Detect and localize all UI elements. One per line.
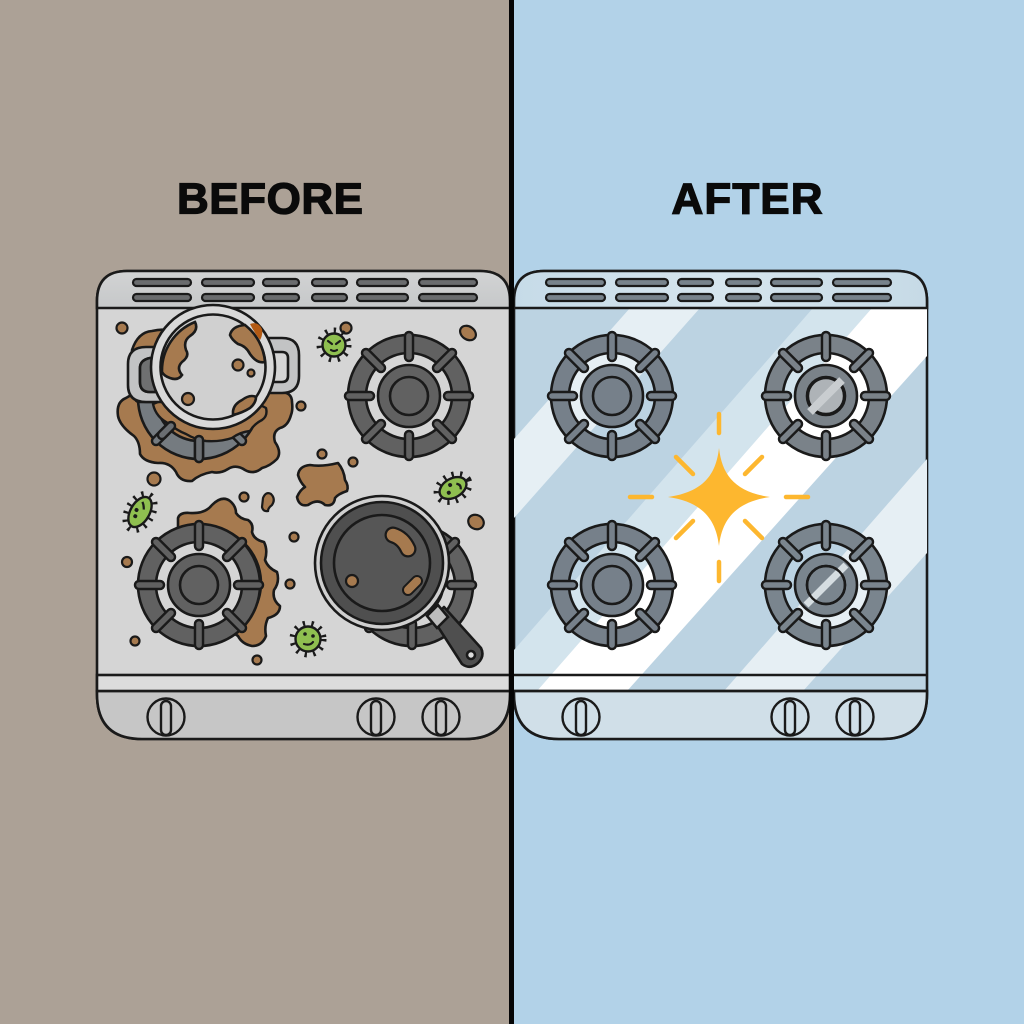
stove body xyxy=(97,271,510,739)
sparkle rays xyxy=(630,414,808,581)
grease splat: center xyxy=(297,463,348,505)
shine stripes xyxy=(514,308,927,691)
burner: bottom left xyxy=(138,524,260,646)
heading: BEFORE: BEFORE xyxy=(177,174,363,224)
pan stain: dot xyxy=(346,575,358,587)
bacteria: right xyxy=(432,469,474,507)
pan rim xyxy=(315,496,449,630)
burner: top left xyxy=(551,335,673,457)
burner glint: bottom right xyxy=(806,565,846,605)
center divider xyxy=(509,0,514,1024)
pot handle: right xyxy=(262,338,299,393)
pan outer xyxy=(321,502,443,624)
sparkle star xyxy=(668,448,770,546)
grease droplets xyxy=(116,322,486,664)
top vent band xyxy=(514,271,927,308)
pan handle xyxy=(433,607,482,667)
pan handle hole xyxy=(467,651,475,659)
burner: bottom right, under pan xyxy=(351,524,473,646)
pot xyxy=(128,305,299,429)
bacteria: left xyxy=(120,490,160,534)
pot rim xyxy=(151,305,275,429)
strip lines xyxy=(514,675,927,691)
vent slots xyxy=(546,279,891,301)
panel: dirty stove xyxy=(97,271,510,739)
pot stain: right xyxy=(230,325,265,362)
background: after side xyxy=(511,0,1024,1024)
burner: top right xyxy=(348,335,470,457)
top vent band xyxy=(97,271,510,308)
grease spill: top left xyxy=(118,330,292,481)
pot handle: left xyxy=(128,347,172,402)
knobs xyxy=(562,698,874,736)
stove body xyxy=(514,271,927,739)
pan stain: bean xyxy=(393,535,408,549)
pot stain: orange drop xyxy=(250,323,262,340)
control strip xyxy=(514,691,927,739)
pan handle connector xyxy=(427,605,448,628)
pot handle hole: left xyxy=(140,358,162,392)
panel: clean stove xyxy=(514,271,927,739)
pan inner xyxy=(334,515,430,611)
prongs over spill xyxy=(162,426,199,458)
pot stain: left xyxy=(162,322,196,379)
pot interior xyxy=(160,314,266,420)
bacteria: bottom xyxy=(293,624,323,654)
burner: bottom right xyxy=(765,524,887,646)
background: before side xyxy=(0,0,511,1024)
pot stain: bottom xyxy=(233,396,256,415)
burner outline restore: bottom right xyxy=(807,566,845,604)
pan stain: small fill xyxy=(408,581,417,590)
pan stain: small xyxy=(408,581,417,590)
burner: top right xyxy=(765,335,887,457)
pan stain: bean fill xyxy=(393,535,408,549)
vent slots xyxy=(133,279,477,301)
grease spill: bottom left xyxy=(178,499,280,646)
frying pan xyxy=(315,496,482,667)
heading: AFTER: AFTER xyxy=(672,174,822,224)
upper strip xyxy=(97,675,510,691)
pot droplets xyxy=(232,360,244,370)
spill over burner xyxy=(153,380,266,441)
bacteria: top xyxy=(320,331,348,359)
burner: top left, under pot xyxy=(138,337,260,459)
knobs xyxy=(148,698,460,736)
burner glint: top right xyxy=(808,378,844,414)
control strip xyxy=(97,691,510,739)
burner: bottom left xyxy=(551,524,673,646)
